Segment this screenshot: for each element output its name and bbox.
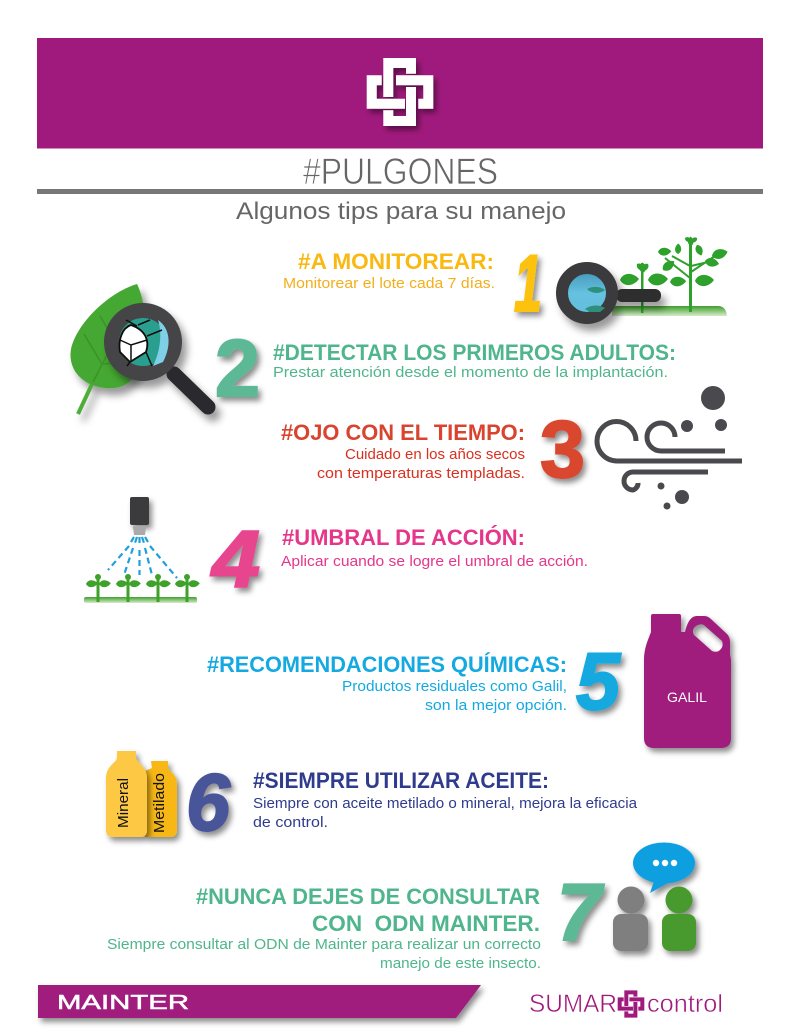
step 2 heading: #DETECTAR LOS PRIMEROS ADULTOS:	[273, 340, 676, 365]
footer brand name: MAINTER	[57, 992, 189, 1014]
step 1 text: Monitorear el lote cada 7 días.	[283, 276, 495, 292]
step 7 text: manejo de este insecto.	[380, 956, 541, 972]
logo: interlocked squares	[372, 63, 428, 121]
sumar control logo: SUMAR	[529, 990, 617, 1018]
number 5: 5	[576, 637, 621, 727]
bottle label: Mineral: Mineral	[116, 778, 132, 828]
step 7 heading	[196, 884, 540, 936]
jug label: GALIL	[667, 689, 707, 705]
bottle label: Metilado: Metilado	[152, 773, 168, 833]
step 3 text	[317, 447, 525, 482]
header banner	[37, 38, 763, 148]
step 7	[107, 842, 696, 972]
footer banner	[38, 985, 481, 1018]
step 1	[283, 236, 729, 329]
subtitle: Algunos tips para su manejo	[236, 198, 566, 225]
number 2: 2	[215, 324, 260, 414]
step 2	[70, 284, 676, 414]
step 5 text	[342, 679, 567, 714]
step 7 heading: #NUNCA DEJES DE CONSULTAR	[196, 884, 540, 909]
step 5	[207, 614, 731, 748]
step 4 text: Aplicar cuando se logre el umbral de acción.	[281, 554, 588, 570]
step 6 text	[253, 796, 638, 831]
step 3	[281, 386, 742, 510]
magnifier	[562, 268, 661, 318]
number 3: 3	[540, 405, 585, 495]
title rule	[37, 189, 763, 194]
icon: plants under magnifier	[562, 236, 729, 318]
step 4 heading: #UMBRAL DE ACCIÓN:	[282, 525, 525, 550]
icon: sprayer over plants	[84, 497, 200, 603]
step 1 heading: #A MONITOREAR:	[298, 249, 494, 274]
icon: GALIL jug	[644, 614, 731, 748]
icon: two people talking	[613, 842, 696, 951]
step 6 text: de control.	[253, 815, 328, 831]
step 3 text: con temperaturas templadas.	[317, 466, 525, 482]
step 7 text	[107, 937, 541, 972]
step 6 text: Siempre con aceite metilado o mineral, mejora la eficacia	[253, 796, 638, 812]
icon: wind	[597, 386, 742, 510]
step 7 heading: CON ODN MAINTER.	[312, 911, 540, 936]
step 6	[106, 751, 638, 848]
step 6 heading: #SIEMPRE UTILIZAR ACEITE:	[253, 768, 549, 793]
step 2 text: Prestar atención desde el momento de la implantación.	[273, 365, 668, 381]
sumar control logo: control	[647, 990, 723, 1018]
sumar control logo	[529, 990, 723, 1018]
number 6: 6	[186, 758, 231, 848]
number 4: 4	[210, 515, 260, 605]
title: #PULGONES	[303, 151, 498, 192]
icon: leaf with magnifier and insect	[70, 284, 208, 414]
step 3 text: Cuidado en los años secos	[345, 447, 525, 463]
number 1: 1	[514, 239, 542, 329]
step 7 text: Siempre consultar al ODN de Mainter para realizar un correcto	[107, 937, 541, 953]
step 3 heading: #OJO CON EL TIEMPO:	[281, 420, 525, 445]
magnifier with insect	[112, 310, 208, 407]
step 4	[84, 497, 588, 605]
number 7: 7	[557, 868, 605, 958]
icon: oil bottles	[106, 751, 177, 837]
step 5 heading: #RECOMENDACIONES QUÍMICAS:	[207, 652, 567, 677]
step 5 text: Productos residuales como Galil,	[342, 679, 567, 695]
speech bubble	[633, 842, 695, 893]
step 5 text: son la mejor opción.	[425, 698, 567, 714]
